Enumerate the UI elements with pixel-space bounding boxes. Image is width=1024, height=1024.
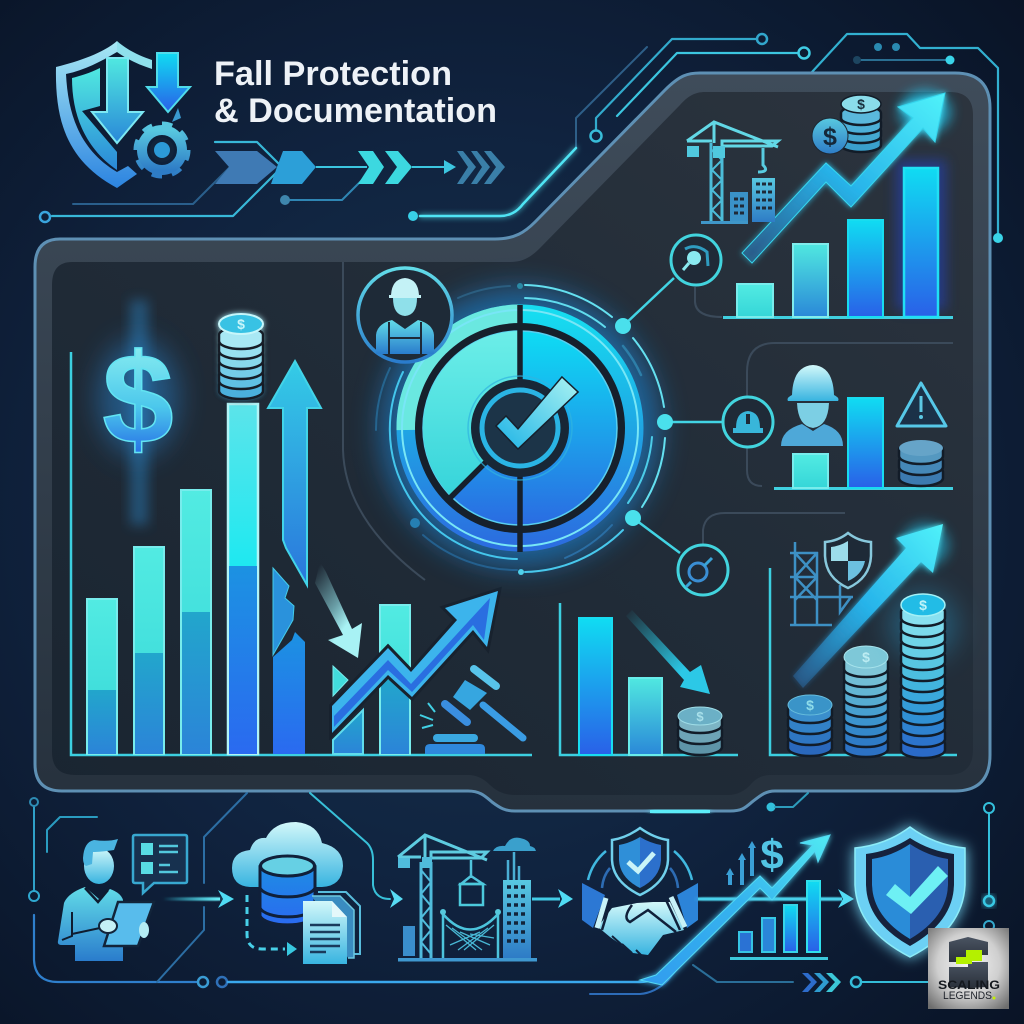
header circuit traces — [40, 34, 1003, 243]
bar 3 — [181, 490, 211, 754]
top right coins: $ — [857, 96, 865, 112]
bar 3 — [848, 220, 883, 317]
central gauge — [380, 288, 660, 568]
documents — [303, 892, 360, 964]
node connector lines and dots — [615, 278, 722, 553]
gauge orbit arcs — [376, 283, 665, 575]
bottom chevrons — [802, 973, 841, 992]
header chevron process arrows — [215, 151, 505, 184]
step 2: cloud database and documents — [232, 822, 360, 964]
checker shield — [825, 533, 871, 588]
coin stack medium — [844, 646, 888, 757]
logo shield icon — [56, 41, 190, 188]
worker figure — [781, 365, 843, 446]
step 1: person with tablet — [58, 839, 154, 961]
rising coins chart — [770, 523, 957, 758]
node: protection mark — [678, 545, 728, 595]
node: hard hat — [723, 397, 773, 447]
scaling legends logo badge: LEGENDS — [943, 990, 992, 1002]
bar 4 — [904, 168, 938, 317]
coin stack small: $ — [806, 697, 814, 713]
dollar glow beam and symbol: $ — [102, 328, 174, 471]
falling arrow — [315, 562, 362, 658]
tall bar — [579, 618, 612, 755]
glowing coin stack — [219, 314, 263, 399]
flow arrow to crane — [390, 889, 403, 908]
down arrow — [626, 610, 710, 694]
main panel — [35, 73, 990, 813]
shaking hands — [597, 897, 685, 957]
small bar — [793, 454, 828, 488]
node: inspection — [671, 235, 721, 285]
top right rising arrow — [742, 90, 951, 263]
worker badge — [358, 268, 452, 362]
step 5: growth chart: $ — [760, 831, 784, 878]
warning sign — [897, 383, 946, 426]
gavel — [420, 669, 523, 754]
flow line to shield — [698, 889, 854, 908]
zigzag rising arrow — [332, 591, 498, 733]
title — [214, 55, 497, 130]
check mark — [497, 378, 577, 448]
declining chart — [560, 603, 738, 755]
database — [260, 856, 315, 925]
bar 1 — [737, 284, 773, 317]
left bar chart — [71, 352, 532, 755]
worker with bars and warning — [774, 365, 953, 490]
gauge hub — [468, 376, 572, 480]
step 5: growth chart — [726, 831, 828, 960]
top right chart — [723, 160, 953, 319]
title: & Documentation — [214, 92, 497, 130]
gauge teal wedge — [423, 331, 520, 497]
top right coins: $ — [823, 123, 837, 151]
top right coins — [812, 95, 881, 154]
small bars behind zigzag — [333, 605, 410, 754]
bottom circuit traces — [29, 793, 994, 994]
bar 4 — [228, 404, 258, 754]
coin stack tall: $ — [919, 597, 927, 613]
bar 2 — [793, 244, 828, 317]
bar 1 — [87, 599, 117, 754]
bar 2 — [134, 547, 164, 754]
scaling legends logo badge: SCALING — [938, 978, 1000, 992]
small shield — [612, 828, 668, 895]
coin stack medium: $ — [862, 649, 870, 665]
step 5: rising trend arrow — [640, 835, 830, 985]
scaling legends logo badge — [928, 928, 1009, 1009]
crane and buildings icon — [687, 122, 778, 224]
glowing coin stack: $ — [237, 316, 245, 332]
coin stack small — [788, 695, 832, 756]
step 3: crane safety net and building — [398, 835, 537, 962]
short bar — [629, 678, 662, 755]
flow arrow to handshake — [532, 889, 573, 908]
small coins: $ — [696, 709, 704, 724]
gauge disc — [423, 331, 617, 525]
step 6: protection shield — [855, 827, 965, 957]
speech bubble — [133, 835, 187, 893]
dollar glow beam and symbol — [98, 300, 178, 525]
scaffold — [790, 542, 853, 625]
tall bar — [848, 398, 883, 488]
step 4: handshake with shield — [582, 828, 698, 957]
coins — [899, 440, 943, 486]
small coins — [678, 707, 722, 755]
panel inner thin traces — [343, 262, 953, 580]
flow arrow to cloud — [163, 890, 234, 908]
diagonal arrow — [793, 523, 949, 688]
title: Fall Protection — [214, 55, 452, 93]
coin stack tall — [889, 591, 957, 758]
broken upward arrow — [268, 361, 321, 754]
